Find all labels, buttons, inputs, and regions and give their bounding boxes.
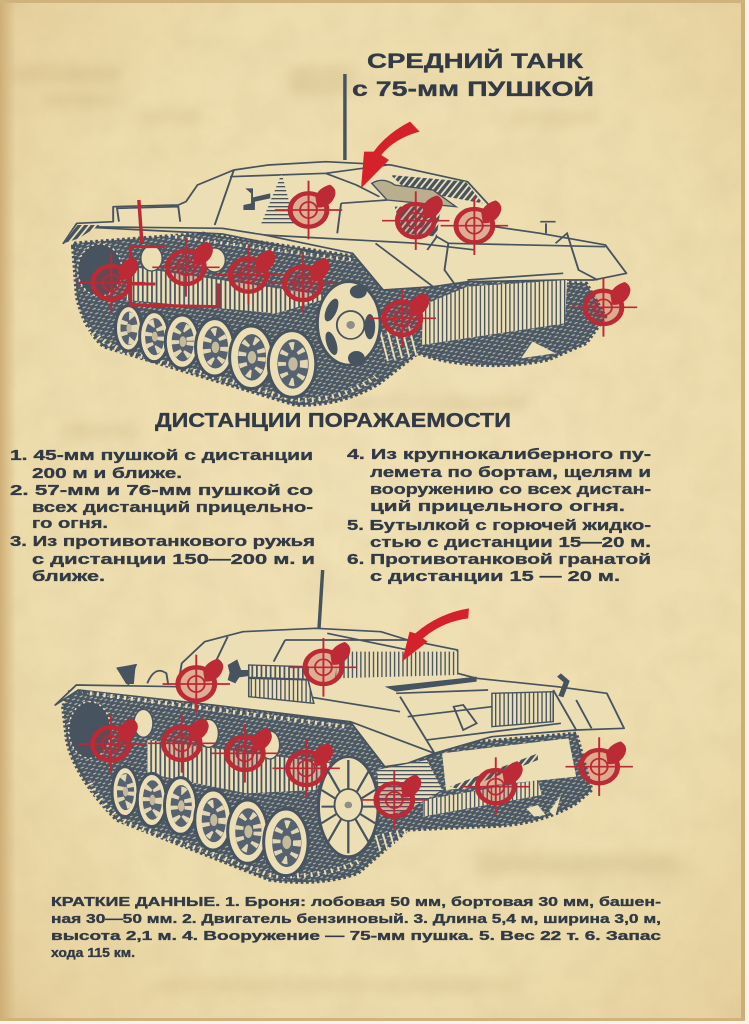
heading: damage distances: ДИСТАНЦИИ ПОРАЖАЕМОСТИ xyxy=(155,410,511,432)
gun mantlet and deck hatching xyxy=(391,175,483,203)
text column left: с дистанции 150—200 м. и xyxy=(32,551,315,568)
rollers and idler xyxy=(69,702,280,759)
fender shading xyxy=(63,225,100,243)
rear plate and lower stripes xyxy=(442,738,576,790)
antenna xyxy=(340,74,349,160)
text column left: 200 м и ближе. xyxy=(32,465,182,482)
brief specifications text: высота 2,1 м. 4. Вооружение — 75-мм пушка. 5. Вес 22 т. 6. Запас xyxy=(51,929,661,943)
text column right: вооружению со всех дистан- xyxy=(370,481,651,498)
target marks xyxy=(77,638,633,829)
spoked drive sprocket xyxy=(318,757,378,857)
text column left: ближе. xyxy=(32,568,105,585)
hull details xyxy=(117,633,592,763)
road wheels xyxy=(112,767,308,876)
text column left: 3. Из противотанкового ружья xyxy=(10,533,315,550)
title: СРЕДНИЙ ТАНК xyxy=(367,49,583,73)
red frame marks xyxy=(129,200,219,307)
antenna xyxy=(318,570,323,650)
text column left: го огня. xyxy=(32,515,108,532)
illustration: upper tank, side-front view with target marks xyxy=(63,74,637,405)
target marks xyxy=(78,181,637,348)
text column right xyxy=(347,446,651,585)
striped engine boxes xyxy=(249,678,314,703)
brief specifications text: ная 30—50 мм. 2. Двигатель бензиновый. 3. Длина 5,4 м, ширина 3,0 м, xyxy=(51,912,661,926)
text column right: 4. Из крупнокалиберного пу- xyxy=(347,446,651,463)
brief specifications text: хода 115 км. xyxy=(51,946,135,960)
side skirt stripes xyxy=(147,740,331,793)
hull and superstructure xyxy=(63,162,626,290)
red arrow xyxy=(361,122,420,188)
hull details xyxy=(77,165,605,310)
track link hatching xyxy=(90,693,346,727)
text column left: всех дистанций прицельно- xyxy=(32,499,313,516)
text column right: лемета по бортам, щелям и xyxy=(370,464,651,481)
text column right: ций прицельного огня. xyxy=(370,498,625,515)
insignia cross xyxy=(228,659,249,683)
track and lower hull xyxy=(63,690,592,882)
brief specifications text xyxy=(51,895,661,960)
hull and superstructure xyxy=(55,628,624,767)
text column left xyxy=(10,447,315,585)
drive sprocket xyxy=(317,282,380,366)
brief specifications text: КРАТКИЕ ДАННЫЕ. 1. Броня: лобовая 50 мм, бортовая 30 мм, башен- xyxy=(51,895,661,909)
text column left: 1. 45-мм пушкой с дистанции xyxy=(10,447,313,464)
track link hatching xyxy=(169,236,353,260)
text column right: 5. Бутылкой с горючей жидко- xyxy=(347,517,651,534)
road wheels xyxy=(115,306,316,397)
text column left: 2. 57-мм и 76-мм пушкой со xyxy=(10,482,313,499)
illustration: lower tank, rear-side view with target marks xyxy=(55,570,633,882)
track and lower hull xyxy=(73,233,605,405)
title xyxy=(352,49,594,101)
return rollers xyxy=(78,244,225,296)
text column right: с дистанции 15 — 20 м. xyxy=(370,568,620,585)
side skirt stripes xyxy=(127,267,333,313)
title: с 75-мм ПУШКОЙ xyxy=(352,77,594,101)
text column right: 6. Противотанковой гранатой xyxy=(347,551,651,568)
front plate stripes xyxy=(422,280,567,345)
text column right: стью с дистанции 15—20 м. xyxy=(370,534,651,551)
red arrow xyxy=(402,608,469,662)
insignia triangle and cross xyxy=(261,173,295,225)
